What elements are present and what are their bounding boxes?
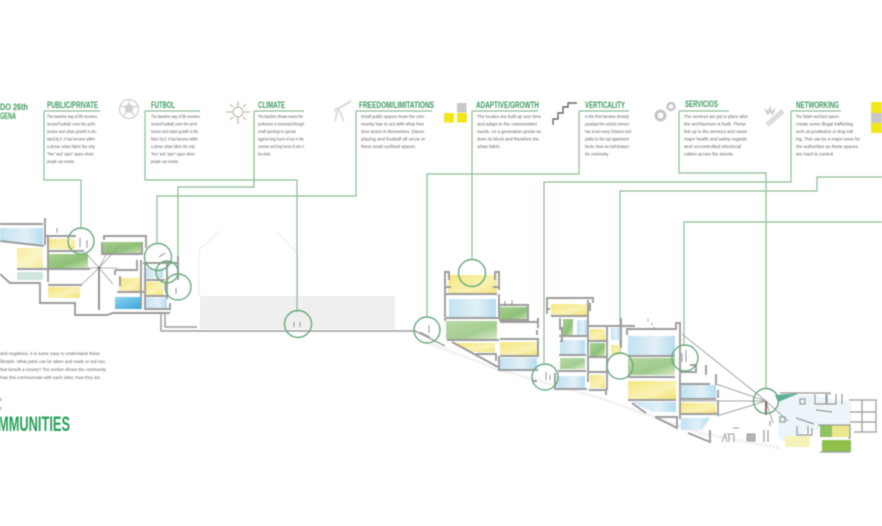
heading: adaptive/growth: ADAPTIVE/GROWTH [476,100,539,110]
fan lines [680,334,788,423]
icon: growth squares [444,103,467,122]
text: networking: are hard to control. [796,152,834,156]
fan lines [80,244,121,286]
small stacked letters [0,397,2,412]
heading: climate: CLIMATE [258,100,285,110]
text: verticality: In the Rion became densely [585,114,630,119]
text: verticality: has occurs every. Entrance and [585,129,631,134]
text: servicios [684,114,749,156]
panel: servicios [684,99,749,156]
text: futbol: fabric by it. It has become within [151,136,198,142]
text: climate: The baseline climate means the [258,114,303,119]
panel: public/private [47,100,98,164]
text: networking: ing. This can be a major issue for [796,136,861,142]
text: futbol: people can reunite. [151,159,179,164]
panel: adaptive/growth [476,100,542,149]
text: public/private [47,114,97,164]
icon: telescope [334,101,351,121]
intro paragraph: and negatives, it is some easy to understand these [0,351,101,356]
text: climate [258,114,304,156]
heading: verticality: VERTICALITY [585,100,625,110]
walls [0,218,178,315]
text: servicios: major health and safety regards [684,136,747,142]
panel: networking [796,100,861,156]
icon: leaf and syringe [764,105,783,125]
text: futbol: a dense urban fabric the only [151,144,196,149]
text: climate: small openings to operate [258,129,296,134]
intro paragraph: lifestyle. What parts can be taken and made to suit into [0,359,106,364]
text: verticality: paths to the top apartment [585,136,630,142]
heading: public/private: PUBLIC/PRIVATE [47,100,98,110]
figures on terraces [57,228,686,380]
intro paragraph [0,351,107,380]
ghost building [199,231,395,329]
text: adaptive/growth [477,114,542,149]
text: adaptive/growth: urban fabric. [477,144,501,149]
text: futbol: The baseline way of life revolves [151,114,200,119]
heading: futbol: FUTBOL [151,100,175,110]
text: freedom/limitations: munity has to act with what free [361,122,425,126]
text: public/private: a dense urban fabric the only [47,144,96,149]
panel: verticality [585,100,631,156]
text: freedom/limitations: Small public spaces mean the com- [361,114,426,119]
text: freedom/limitations: these small confined spaces. [361,144,416,149]
text: servicios: cables across the streets. [684,152,734,156]
fan hub [98,267,100,269]
text: servicios: and uncontrolled electrical [684,144,741,149]
intro paragraph: how this communicate with each other, how they act. [0,375,101,380]
text: public/private: "free" and "open" space where [47,152,94,156]
street figures and car [722,428,755,442]
ground line [161,312,445,346]
text: adaptive/growth: needs. As a generation grows so [477,129,542,134]
room fills [628,336,851,452]
section: right housing block [627,323,876,452]
text: adaptive/growth: The locales are built up over time [477,114,542,119]
text: networking [796,114,861,156]
text: freedom/limitations: playing and football all occur in [361,136,426,142]
text: futbol: tecture and urban growth is the [151,129,198,134]
text: futbol: "free" and "open" space where [151,152,195,156]
text: public/private: around football; even the archi- [47,122,96,126]
text: verticality: the community. [585,152,609,156]
icon: right squares [871,102,882,133]
title: communities: MMUNITIES [0,413,70,436]
walls [445,272,635,395]
heading: freedom/limitations: FREEDOM/LIMITATIONS [359,100,434,110]
text: public/private: The baseline way of life revolves [47,114,97,119]
text: climate: against long hours of sun in the [258,136,304,142]
text: adaptive/growth: does its block and therefore the [477,136,540,142]
text: freedom/limitations [361,114,426,149]
text: climate: summer and long hours of rain in [258,144,304,149]
panel: futbol [151,100,200,164]
panel: freedom/limitations [359,100,434,149]
left heading fragment: GENA [0,111,16,121]
room fills [446,275,620,388]
text: public/private: people can reunite. [47,159,75,164]
text: freedom/limitations: door action in themselves. Dance, [361,129,425,134]
sloped terrain [420,340,780,448]
section: left housing block [0,218,178,315]
heading: servicios: SERVICIOS [685,99,718,109]
panel: climate [258,100,304,156]
leader lines [44,111,882,388]
text: networking: create some illegal trafficking [796,122,854,126]
left heading fragment: DO 26th [0,102,28,112]
text: adaptive/growth: and adapt to the communities [477,122,537,126]
text: climate: the winter. [258,152,271,156]
text: verticality: populated the vertical common [585,122,629,126]
text: servicios: The services are put in place after [684,114,749,119]
text: futbol [151,114,200,164]
column [98,268,100,310]
text: verticality: blocks, these are built between [585,144,629,149]
fan hub and column [765,401,767,415]
room fills [0,228,167,309]
section: central housing block [445,272,635,395]
detail circles [68,228,778,414]
text: servicios: link up to the services and cause [684,129,748,134]
text: networking: the authorities as these spaces [796,144,858,149]
heading: networking: NETWORKING [796,100,839,110]
text: public/private: tecture and urban growth is dic- [47,129,97,134]
text: networking: The hidden and back spaces [796,114,839,119]
icon: football [120,100,138,118]
icon: stairs [553,103,577,125]
text: climate: preference is channeled through [258,122,304,126]
text: futbol: around football; even the archi- [151,122,198,126]
service structures [764,393,876,452]
icon: sun [226,101,250,124]
text: networking: such as prostitution or drug traf- [796,129,855,134]
text: public/private: tated by it. It has become within [47,136,95,142]
left heading fragment [0,102,28,121]
walls [627,323,718,442]
text: servicios: the architecture is built. These [684,122,747,126]
text: verticality [585,114,631,156]
intro paragraph: that benefit a society? The section shows the community [0,367,107,372]
icon: gears [656,103,674,120]
